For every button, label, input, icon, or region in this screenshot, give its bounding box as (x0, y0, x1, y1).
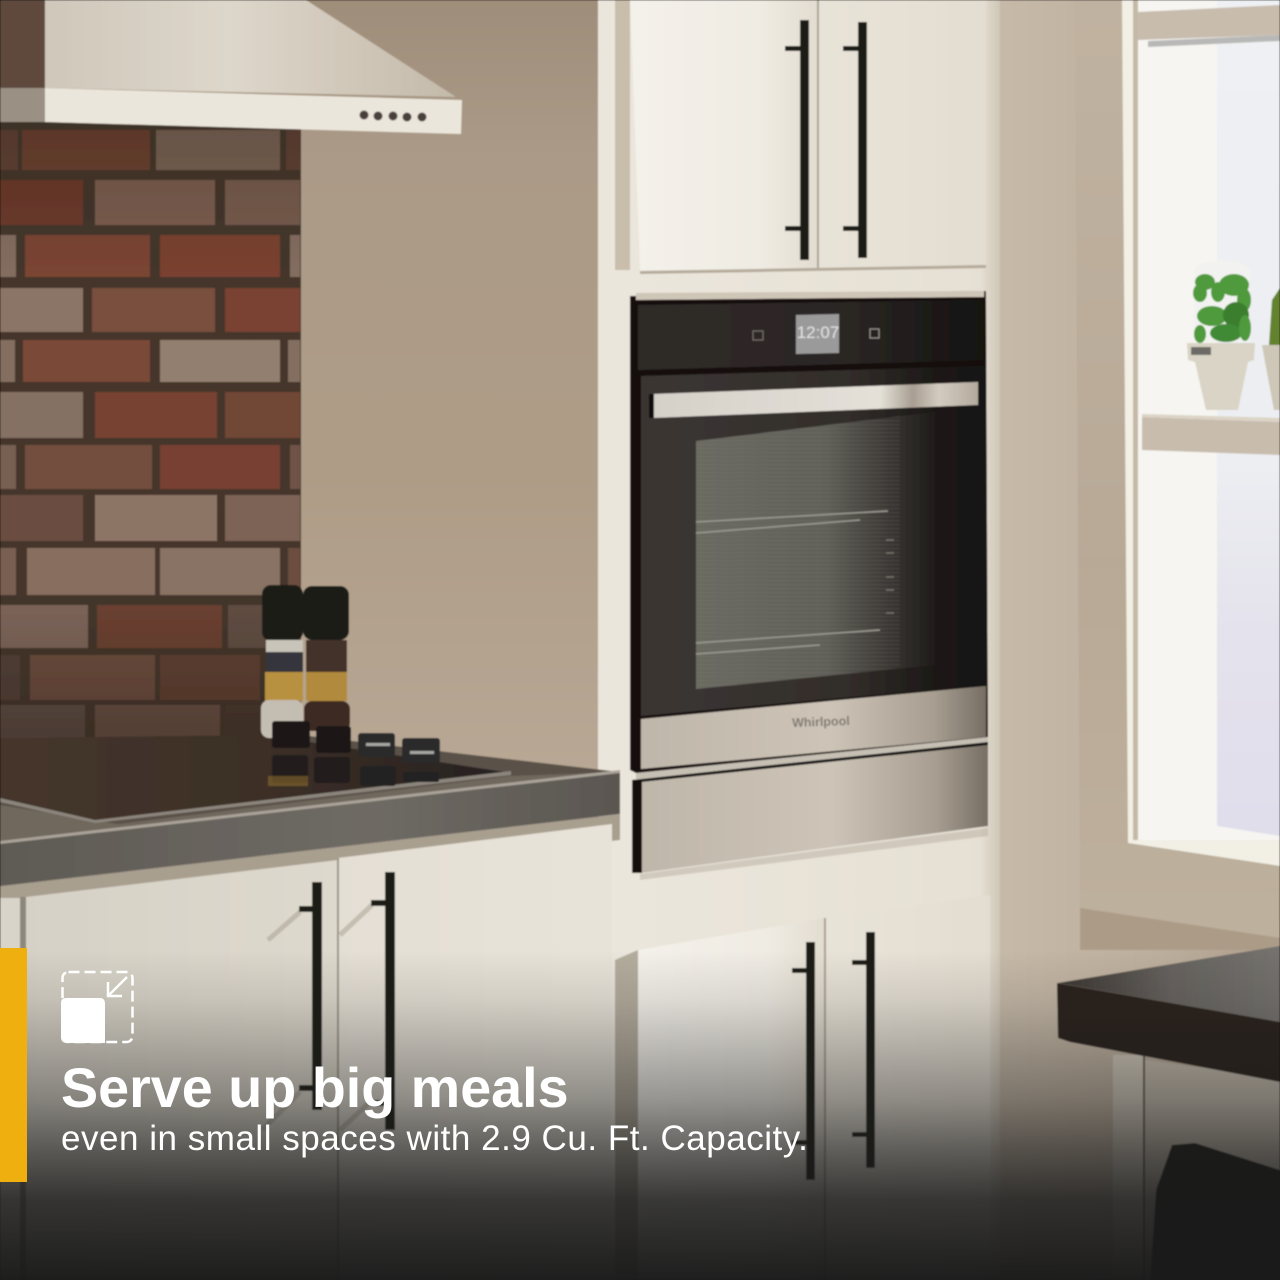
cabinet handles (299, 872, 395, 1130)
tall pillar (598, 0, 1000, 1280)
wall oven (630, 291, 988, 880)
steel strip with logo: Whirlpool (792, 714, 850, 730)
left wall (0, 0, 610, 800)
lower left cabinets (0, 814, 620, 1280)
dish towel (1150, 1143, 1280, 1280)
display (753, 314, 879, 354)
lower handles (792, 932, 875, 1180)
steel strip with logo (641, 686, 986, 769)
brick backsplash (0, 122, 301, 747)
countertop (0, 735, 620, 886)
yellow accent bar (0, 948, 27, 1182)
potted plants (1187, 260, 1280, 410)
window (1075, 0, 1280, 950)
cabinet handle shadows (262, 905, 372, 1130)
warming drawer (632, 737, 988, 873)
title: Serve up big meals (61, 1057, 569, 1119)
window shelves (1138, 5, 1280, 455)
upper pillar cabinets (615, 0, 986, 274)
display: 12:07 (797, 323, 839, 342)
racks (696, 511, 888, 654)
control panel (638, 300, 986, 370)
island counter and cabinet (1057, 946, 1280, 1280)
bottom dark gradient overlay (0, 950, 1280, 1280)
icon: resize / compact capacity (61, 972, 132, 1043)
hood buttons (360, 110, 426, 122)
lower pillar cabinets (615, 895, 990, 1280)
right wall (1000, 0, 1280, 1280)
cooktop knobs (268, 721, 440, 786)
range hood (0, 0, 462, 134)
spice mills (261, 585, 350, 738)
oven door (641, 366, 986, 716)
subtitle: even in small spaces with 2.9 Cu. Ft. Capacity. (61, 1119, 808, 1158)
oven window (696, 412, 935, 689)
cooktop (0, 735, 511, 822)
upper handles (785, 20, 867, 260)
door handle (652, 382, 978, 418)
